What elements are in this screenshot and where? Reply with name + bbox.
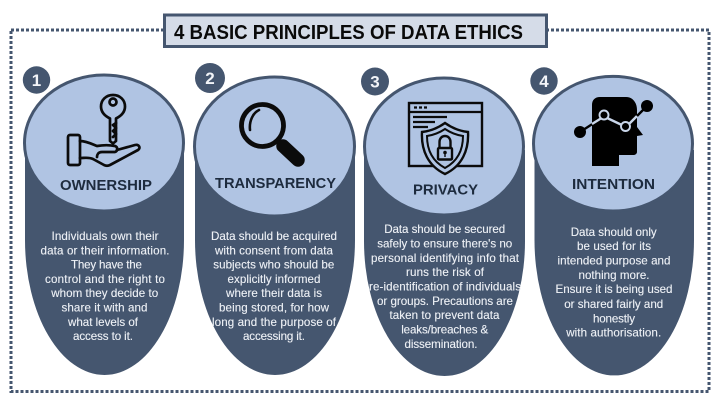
panel: transparency — [194, 63, 355, 375]
text: intention description: nothing more. — [578, 269, 650, 282]
text: ownership description: They have the — [71, 258, 142, 272]
text: transparency description: explicitly informed — [228, 273, 320, 286]
number badge 4 — [530, 67, 558, 95]
text: ownership description: whom they decide to — [50, 287, 158, 300]
text: ownership description: data or their information. — [40, 244, 170, 257]
text: ownership description: share it with and — [62, 302, 148, 314]
number badge 2 — [195, 63, 225, 93]
panel: intention — [530, 67, 694, 375]
text: ownership description: what levels of — [67, 316, 139, 329]
panel: ownership — [23, 66, 184, 375]
text: transparency description: subjects who should be — [213, 258, 334, 272]
text: ownership description: Individuals own their — [52, 230, 159, 243]
text: transparency description: Data should be acquired — [211, 230, 337, 243]
title — [164, 15, 546, 46]
text: transparency description: long and the purpose of — [212, 316, 337, 329]
text: transparency description: accessing it. — [243, 330, 305, 343]
text: transparency description: being stored, for how — [219, 302, 330, 314]
disc 2 — [194, 77, 354, 216]
capsule body 4 — [534, 150, 694, 375]
text: intention description: honestly — [593, 313, 635, 326]
text: ownership description — [40, 230, 170, 343]
icon: browser window with shield and padlock — [409, 103, 482, 174]
icon: head with data line — [574, 97, 653, 166]
text: privacy description: leaks/breaches & — [401, 324, 488, 337]
number badge 1: 1 — [32, 71, 41, 90]
heading: ownership: OWNERSHIP — [60, 177, 152, 194]
title: 4 BASIC PRINCIPLES OF DATA ETHICS — [174, 21, 523, 44]
text: intention description — [556, 226, 672, 340]
heading: transparency: TRANSPARENCY — [215, 175, 336, 192]
text: privacy description: runs the risk of — [406, 266, 485, 279]
number badge 3 — [361, 68, 389, 96]
text: intention description: be used for its — [577, 240, 651, 253]
text: privacy description: dissemination. — [404, 338, 478, 351]
text: ownership description: access to it. — [73, 330, 133, 343]
text: intention description: Data should only — [571, 226, 657, 239]
text: transparency description: with consent from data — [214, 244, 334, 257]
text: privacy description: Data should be secured — [384, 223, 505, 236]
icon: magnifying glass — [242, 104, 298, 160]
text: ownership description: control and the right to — [45, 273, 165, 286]
text: intention description: Ensure it is being used — [556, 283, 672, 296]
disc 1 — [24, 75, 184, 211]
panel: privacy — [361, 68, 525, 376]
text: transparency description — [211, 230, 337, 343]
text: intention description: with authorisation. — [565, 327, 661, 340]
text: privacy description: or groups. Precautions are — [377, 295, 513, 308]
capsule body 1 — [25, 150, 184, 375]
text: intention description: or shared fairly and — [564, 298, 663, 311]
number badge 3: 3 — [370, 72, 380, 92]
text: privacy description: taken to prevent data — [390, 309, 500, 322]
disc 3 — [364, 78, 524, 215]
text: privacy description: safely to ensure there's no — [377, 238, 512, 251]
capsule body 2 — [195, 150, 355, 375]
text: intention description: intended purpose and — [558, 255, 670, 268]
capsule body 3 — [364, 150, 525, 376]
icon: hand holding key — [68, 95, 139, 166]
heading: privacy: PRIVACY — [413, 182, 478, 199]
text: privacy description: re-identification of individuals — [369, 281, 521, 294]
text: privacy description: personal identifying info that — [371, 252, 520, 265]
number badge 2: 2 — [205, 69, 215, 88]
number badge 1 — [23, 66, 50, 94]
text: privacy description — [369, 223, 521, 351]
heading: intention: INTENTION — [572, 176, 655, 193]
disc 4 — [534, 76, 692, 211]
number badge 4: 4 — [539, 72, 549, 91]
text: transparency description: where their data is — [225, 287, 322, 300]
